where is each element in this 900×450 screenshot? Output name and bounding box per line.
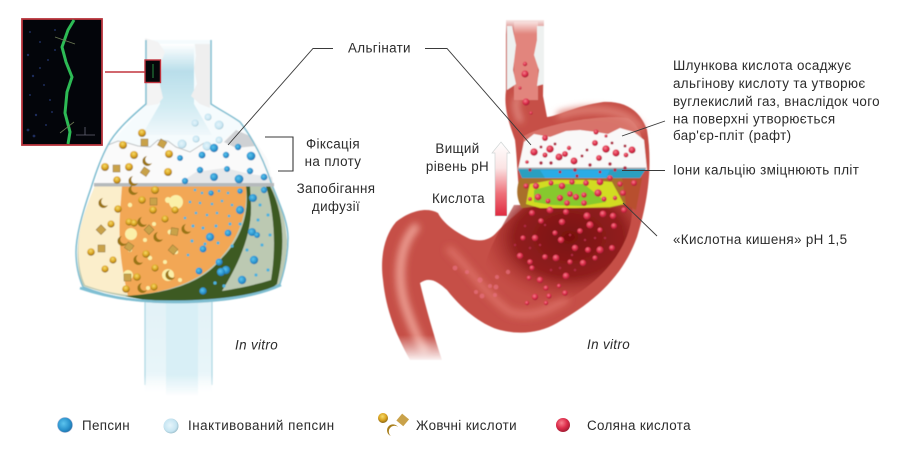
esophagus foam left [507,26,516,90]
label: acid: Кислота [432,191,485,206]
pepsin bubbles [177,144,267,295]
flask illustration [76,38,288,397]
small pepsin dots [184,189,272,288]
neck foam right [191,44,210,108]
legend [58,413,691,436]
label: raft fixation: Фіксація [306,136,360,152]
text block: raft formation: на поверхні утворюється [673,112,835,126]
label: alginates: Альгінати [348,40,411,56]
inset connector [105,60,160,82]
flask stem [145,300,212,395]
flask neck and air [95,40,273,185]
leader lines [228,48,665,236]
flask foam raft [95,130,273,183]
bile acid cubes [96,139,178,281]
bile acid spheres [87,129,179,293]
text block: raft formation: Шлункова кислота осаджує [673,58,852,73]
red acid droplets large [517,62,637,305]
label: raft fixation: на плоту [305,154,361,169]
fundus upper inner [520,117,645,168]
esophagus foam right [534,26,544,86]
label: in vitro left: In vitro [235,338,278,352]
flask glass outline [76,40,288,303]
legend: pepsin: Пепсин [82,418,130,433]
text block: raft formation: бар'єр-пліт (рафт) [673,128,791,143]
green raft strand [62,20,74,144]
pale bubbles [178,114,224,150]
faded droplets near pylorus [453,266,510,298]
label: diffusion prevention: дифузії [312,199,360,214]
stomach illustration [382,18,650,362]
label: diffusion prevention [297,181,375,214]
text block: raft formation [673,58,880,143]
stomach foam raft [518,128,647,170]
stomach wall [382,20,650,360]
legend: bile acids [378,413,517,436]
bile acid crescents [98,156,191,293]
bracket [265,137,293,171]
esophagus inner [514,22,538,100]
green yellow pocket [526,180,624,208]
label: raft fixation [305,136,361,169]
top fade [504,18,546,34]
calcium blue layer [518,169,646,178]
pale dots in liquid [123,195,183,290]
label: calcium ions: Іони кальцію зміцнюють пліт [673,162,859,178]
label: higher pH: рівень pH [426,159,489,174]
label: acid pocket: «Кислотна кишеня» pH 1,5 [673,232,847,247]
label: higher pH [426,141,489,174]
flask liquid [78,186,287,301]
wall highlights [400,98,640,350]
legend: inactivated pepsin: Інактивований пепсин [188,418,335,433]
pH arrow [492,142,510,216]
label: in vitro right: In vitro [587,337,630,352]
cream liquid region [78,186,128,295]
grey line [518,168,646,170]
dark lumen [482,205,632,312]
text block: raft formation: альгінову кислоту та утворює [673,76,866,91]
blue speckle [27,29,56,137]
small droplets [514,142,627,271]
dark green band [125,186,282,302]
neck foam left [145,38,165,106]
legend: hydrochloric acid: Соляна кислота [587,418,691,433]
label: higher pH: Вищий [435,141,480,156]
grey separator [94,183,274,186]
orange liquid region [119,186,246,296]
bile brown layer [517,178,642,210]
legend: bile acids: Жовчні кислоти [416,418,517,433]
text block: raft formation: вуглекислий газ, внаслідок чого [673,94,880,109]
label: diffusion prevention: Запобігання [297,181,375,196]
legend: pepsin [58,418,130,433]
micrograph inset [22,19,102,145]
